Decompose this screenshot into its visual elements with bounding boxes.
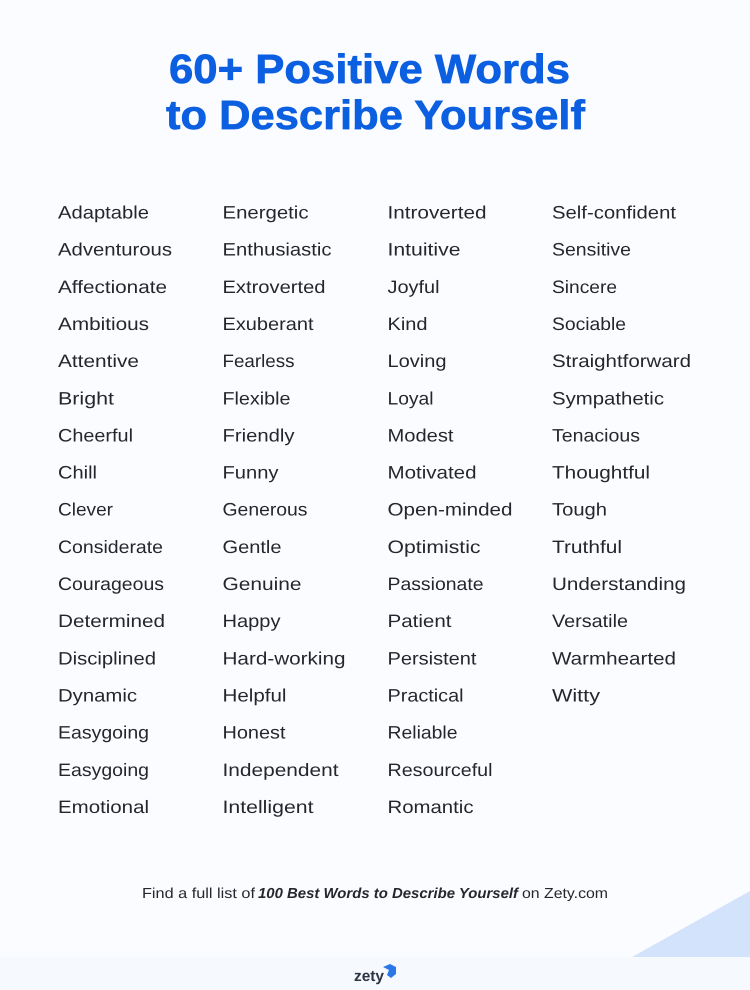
word column 3: Romantic	[388, 797, 474, 817]
word column 3: Optimistic	[388, 537, 480, 557]
word column 1: Chill	[58, 463, 97, 483]
word column 2: Happy	[222, 611, 280, 631]
word column 4: Thoughtful	[552, 463, 650, 483]
word column 1: Easygoing	[58, 723, 149, 743]
word column 2: Gentle	[222, 537, 282, 557]
word column 2: Intelligent	[222, 797, 314, 817]
word column 1: Bright	[58, 388, 114, 408]
word column 4: Truthful	[552, 537, 622, 557]
word column 3: Open-minded	[388, 500, 512, 520]
word column 4: Tenacious	[552, 425, 640, 445]
footer note: Find a full list of	[142, 886, 256, 902]
footer note: 100 Best Words to Describe Yourself	[258, 886, 520, 902]
footer note	[142, 886, 608, 902]
title	[166, 46, 585, 138]
word column 3: Loyal	[388, 388, 434, 408]
word column 3: Persistent	[388, 648, 476, 668]
word column 2: Exuberant	[222, 314, 314, 334]
word column 3: Intuitive	[388, 240, 460, 260]
word column 4	[552, 202, 691, 706]
word column 3: Patient	[388, 611, 452, 631]
word column 3: Kind	[388, 314, 428, 334]
word column 4: Tough	[552, 500, 607, 520]
word column 4: Sociable	[552, 314, 626, 334]
word column 2: Helpful	[222, 686, 286, 706]
word column 1: Attentive	[58, 351, 139, 371]
word column 4: Sensitive	[552, 240, 631, 260]
word column 1: Determined	[58, 611, 165, 631]
word column 3: Practical	[388, 686, 464, 706]
word column 3: Modest	[388, 425, 454, 445]
word column 2: Generous	[222, 500, 308, 520]
zety logo: zety	[354, 968, 384, 985]
word column 4: Versatile	[552, 611, 628, 631]
word column 2: Independent	[222, 760, 338, 780]
word column 3: Motivated	[388, 463, 476, 483]
word column 3: Resourceful	[388, 760, 492, 780]
word column 2: Energetic	[222, 202, 308, 222]
word column 2: Enthusiastic	[222, 240, 332, 260]
word column 2: Fearless	[222, 351, 294, 371]
word column 4: Sympathetic	[552, 388, 664, 408]
word column 2	[222, 202, 346, 817]
word column 1: Considerate	[58, 537, 163, 557]
word column 1: Cheerful	[58, 425, 133, 445]
word column 2: Hard-working	[222, 648, 346, 668]
word column 2: Friendly	[222, 425, 294, 445]
word column 1: Adventurous	[58, 240, 172, 260]
word column 4: Straightforward	[552, 351, 691, 371]
word column 1: Dynamic	[58, 686, 137, 706]
word column 1: Disciplined	[58, 648, 156, 668]
word column 4: Witty	[552, 686, 600, 706]
word column 4: Self-confident	[552, 202, 676, 222]
word column 4: Warmhearted	[552, 648, 676, 668]
word column 4: Understanding	[552, 574, 686, 594]
word column 1: Affectionate	[58, 277, 167, 297]
corner triangle	[632, 891, 750, 957]
word column 2: Genuine	[222, 574, 302, 594]
title: 60+ Positive Words	[169, 46, 570, 92]
word column 1: Courageous	[58, 574, 164, 594]
word column 1: Emotional	[58, 797, 149, 817]
word column 2: Extroverted	[222, 277, 326, 297]
word column 3: Introverted	[388, 202, 486, 222]
word column 2: Honest	[222, 723, 286, 743]
zety logo	[354, 964, 396, 985]
word column 1	[58, 202, 172, 817]
word column 3: Reliable	[388, 723, 458, 743]
word column 2: Flexible	[222, 388, 290, 408]
word column 1: Clever	[58, 500, 113, 520]
footer band	[0, 957, 750, 990]
word column 3: Joyful	[388, 277, 440, 297]
word column 1: Ambitious	[58, 314, 149, 334]
word column 1: Easygoing	[58, 760, 149, 780]
word column 3: Passionate	[388, 574, 484, 594]
word column 3: Loving	[388, 351, 446, 371]
word column 1: Adaptable	[58, 202, 149, 222]
word column 3	[388, 202, 512, 817]
word column 2: Funny	[222, 463, 278, 483]
title: to Describe Yourself	[166, 92, 585, 138]
word column 4: Sincere	[552, 277, 617, 297]
footer note: on Zety.com	[522, 886, 608, 902]
